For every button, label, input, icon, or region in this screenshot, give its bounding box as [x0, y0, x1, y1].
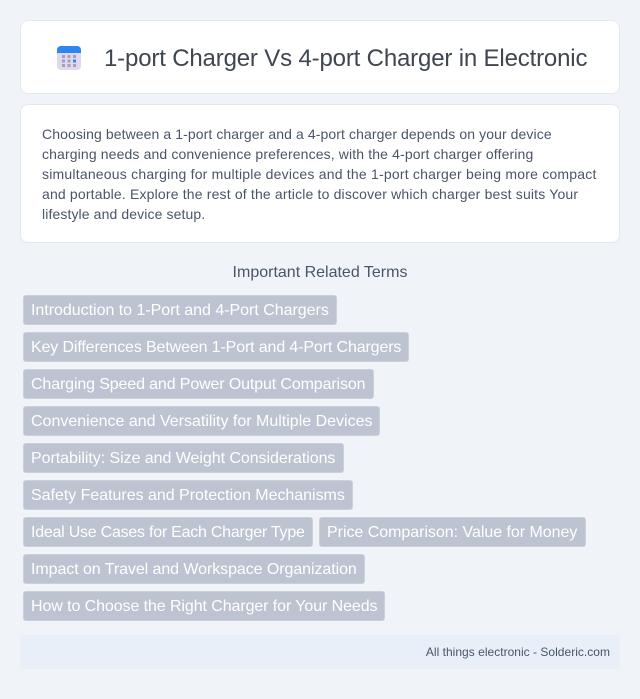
- footer: [20, 635, 620, 669]
- heading: important related terms: Important Related Terms: [233, 264, 407, 281]
- tag: safety: [23, 480, 353, 510]
- tag: introduction: [23, 295, 337, 325]
- intro text panel: [20, 104, 620, 243]
- tag: portability: [23, 443, 344, 473]
- tag: key differences: Key Differences Between 1-Port and 4-Port Chargers: [31, 339, 401, 356]
- tag: convenience: Convenience and Versatility for Multiple Devices: [31, 413, 372, 430]
- tag: price comparison: [319, 517, 586, 547]
- tag: price comparison: Price Comparison: Value for Money: [327, 524, 577, 541]
- tag: portability: Portability: Size and Weight Considerations: [31, 450, 335, 467]
- tag: charging speed: [23, 369, 374, 399]
- tag: key differences: [23, 332, 409, 362]
- tag list: [23, 295, 586, 621]
- tag: ideal use cases: [23, 517, 313, 547]
- intro paragraph: lifestyle and device setup.: [42, 206, 205, 222]
- tag: introduction: Introduction to 1-Port and 4-Port Chargers: [31, 302, 329, 319]
- intro paragraph: Choosing between a 1-port charger and a 4-port charger depends on your device: [42, 126, 552, 142]
- tag: how to choose: [23, 591, 385, 621]
- tag: safety: Safety Features and Protection Mechanisms: [31, 487, 345, 504]
- intro paragraph: simultaneous charging for multiple devices and the 1-port charger being more compact: [42, 166, 597, 182]
- intro paragraph: and portable. Explore the rest of the article to discover which charger best suits Your: [42, 186, 578, 202]
- tag: ideal use cases: Ideal Use Cases for Each Charger Type: [31, 524, 305, 541]
- tag: charging speed: Charging Speed and Power Output Comparison: [31, 376, 365, 393]
- intro paragraph: [42, 126, 597, 222]
- header card: [20, 20, 620, 94]
- tag: travel impact: Impact on Travel and Workspace Organization: [31, 561, 357, 578]
- intro paragraph: charging needs and convenience preferences, with the 4-port charger offering: [42, 146, 533, 162]
- footer text: All things electronic - Solderic.com: [426, 645, 610, 659]
- tag: how to choose: How to Choose the Right Charger for Your Needs: [31, 598, 377, 615]
- tag: travel impact: [23, 554, 365, 584]
- tag: convenience: [23, 406, 380, 436]
- title: 1-port Charger Vs 4-port Charger in Electronic: [104, 45, 587, 72]
- icon: calendar grid: [57, 46, 81, 70]
